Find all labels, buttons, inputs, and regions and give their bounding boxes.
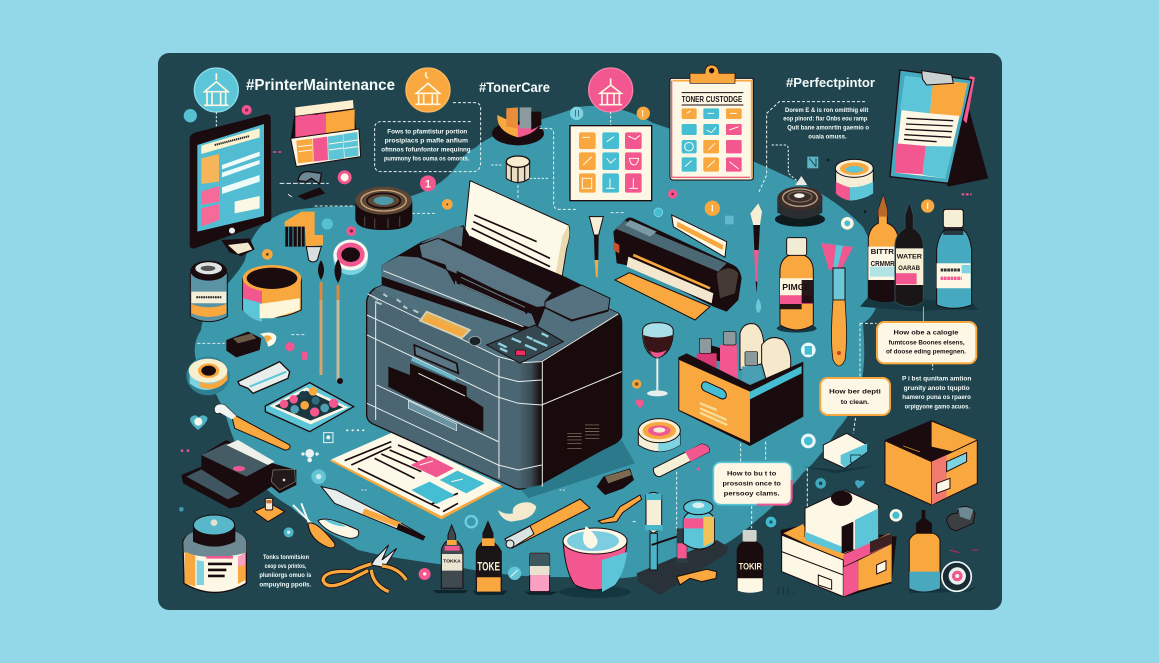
icon: orange-handled pen xyxy=(505,499,590,548)
callout: lower: prososin once to xyxy=(722,481,781,488)
callout: upper right xyxy=(877,322,976,363)
circle icon: cyan xyxy=(194,68,238,129)
icon: small stand xyxy=(254,498,285,522)
dashed connector and text block: right top: eop pinord: fiar Onbs eou ramp xyxy=(783,116,867,123)
dashed callout: text block: pummony fos ouma os omonts. xyxy=(384,156,469,163)
icon: cream cartridge xyxy=(803,433,878,473)
icon: orange pliers xyxy=(323,545,406,592)
icon: bottom bottles xyxy=(433,522,558,595)
icon: orange handle tool xyxy=(215,404,290,450)
printer body xyxy=(367,283,622,489)
icon: small roller xyxy=(491,128,577,209)
icon: orange tin xyxy=(243,265,301,322)
icon: big paint brush xyxy=(821,243,853,366)
icon: orange bottle with label: PIMGE xyxy=(782,282,811,292)
printed sheet xyxy=(330,433,503,519)
right side xyxy=(540,313,622,485)
text block: right: P i bst qunitam amtion xyxy=(902,376,971,383)
icon: toner checklist clipboard xyxy=(670,65,753,180)
vents xyxy=(567,425,599,448)
icon: open orange box xyxy=(885,420,977,505)
upper unit shadow xyxy=(382,225,610,332)
dashed connector and text block: right top: Quit bane amonrtin gaemio o xyxy=(787,125,869,132)
title: #PrinterMaintenance: #PrinterMaintenance xyxy=(246,77,395,94)
icon: bottom bottles: TOKE xyxy=(477,561,500,574)
teal blob background xyxy=(195,106,880,579)
icon: orange clip xyxy=(598,495,642,523)
icon: colour swatch book xyxy=(291,100,361,167)
control panel xyxy=(420,312,470,338)
front rail xyxy=(382,256,538,329)
icon: black tape roll xyxy=(355,187,412,230)
printer xyxy=(367,181,635,498)
text block: right: grunity anoto tquptio xyxy=(904,385,970,392)
right box xyxy=(545,285,610,320)
small dots centre right xyxy=(632,323,933,533)
text block: lower left: pluniiorgs omuo is xyxy=(259,572,312,579)
dashed callout: text block: Fows to pfamtistur portion xyxy=(387,128,467,135)
circle icon: pink xyxy=(589,68,633,126)
small dots near monitor xyxy=(184,105,283,152)
callout: lower xyxy=(713,462,792,505)
callout: upper right: fumtcose Boones elsens, xyxy=(889,339,965,346)
icon: three label bottles: WATER xyxy=(897,253,922,260)
dashed callout: text block xyxy=(375,103,481,172)
icon: small cyan jar xyxy=(835,159,873,201)
icon: silver clip xyxy=(238,362,290,393)
icon: white scissors xyxy=(293,503,359,548)
callout: lower: How to bu t to xyxy=(727,470,776,477)
dots around tile card xyxy=(570,107,972,230)
icon: small fan brush xyxy=(589,217,603,277)
text block: right: hamero puna os rpaero xyxy=(902,394,971,401)
icon: toner tray xyxy=(492,107,544,145)
icon: colour tray xyxy=(265,383,354,432)
callout: middle: How ber depti xyxy=(829,388,881,395)
top deck xyxy=(375,283,618,362)
icon: small black bottle TONER xyxy=(737,530,763,593)
icon: lab stand xyxy=(637,492,794,595)
dashed connector and text block: right top: ouaia omuss. xyxy=(808,134,847,141)
dashed connector and text block: right top xyxy=(758,102,869,213)
dashed connector and text block: right top: Dorem E & is ron omitthig elit xyxy=(785,107,869,114)
lid xyxy=(419,238,552,307)
icon: three label bottles: BITTR xyxy=(871,249,894,256)
icon: cube in box xyxy=(781,490,897,597)
markers around tape: 1 xyxy=(425,178,431,190)
icon: laminator xyxy=(613,215,742,320)
callout: lower: persooy clams. xyxy=(724,491,780,498)
dashed callout: text block: prosipiacs p mafle anflum xyxy=(385,137,468,144)
paper sheet xyxy=(463,181,570,290)
callout: middle: to clean. xyxy=(841,399,869,406)
icon: three label bottles: CRMMR xyxy=(871,261,895,268)
small black cartridge (left) xyxy=(197,332,307,360)
icon: toner checklist clipboard: TONER CUSTODGE xyxy=(682,95,743,104)
title: #Perfectpintor: #Perfectpintor xyxy=(786,75,875,90)
icon: tape roll xyxy=(186,357,230,395)
icon: standing tablet xyxy=(890,70,988,187)
icon: thin pink brush xyxy=(750,203,762,313)
seam lines xyxy=(367,294,622,487)
text block: lower left: ceop ovs printos, xyxy=(265,563,306,570)
icon: tape stand xyxy=(280,172,329,200)
callout: upper right: of doose eding pemegnen. xyxy=(886,349,966,356)
icon: supplies box xyxy=(678,324,803,446)
icon: label jar xyxy=(183,515,246,592)
icon: pink bowl xyxy=(559,526,631,598)
back wing xyxy=(422,227,463,250)
icon: orange bottle and ring xyxy=(908,506,978,593)
text block: right: orpigyone gamo acuos. xyxy=(905,403,970,410)
icon: black machine xyxy=(181,440,296,508)
markers around tape xyxy=(262,170,518,260)
title: #TonerCare: #TonerCare xyxy=(479,79,550,95)
icon: grey can xyxy=(190,261,227,322)
icon: monitor xyxy=(190,114,271,256)
icon card: nine tiles xyxy=(570,126,652,201)
callout: middle xyxy=(820,378,890,415)
callout: upper right: How obe a calogie xyxy=(893,330,959,337)
icon: bottom bottles: TOKKA xyxy=(443,559,461,565)
text block: lower left: Tonks tonmitsion xyxy=(263,554,309,561)
icon: dark tape spool with cone xyxy=(775,176,825,227)
icon: three label bottles xyxy=(860,195,978,322)
text block: lower left: ompuying ppoils. xyxy=(259,582,312,589)
icon: pink ring tape xyxy=(333,240,368,275)
circle icon: orange xyxy=(406,68,450,112)
icon: three label bottles: OARAB xyxy=(898,265,920,272)
icon: long pen xyxy=(321,487,426,540)
text block: right xyxy=(902,376,971,410)
icon: tin and marker xyxy=(597,419,709,495)
panel: dark board xyxy=(158,53,1002,610)
small markers left xyxy=(179,415,566,580)
icon: two fine brushes xyxy=(318,259,343,384)
paper slot xyxy=(457,271,532,314)
icon: orange bottle with label xyxy=(777,238,817,333)
text block: lower left xyxy=(259,554,312,589)
icon: orange comb xyxy=(285,212,323,262)
icon: wine glass xyxy=(643,323,673,396)
dashed callout: text block: ofmnos fofunfontor mequinng xyxy=(381,146,471,153)
drawer panels xyxy=(388,363,483,432)
icon: small black bottle TONER: TOKIR xyxy=(739,561,762,571)
printer shadow xyxy=(522,440,635,498)
